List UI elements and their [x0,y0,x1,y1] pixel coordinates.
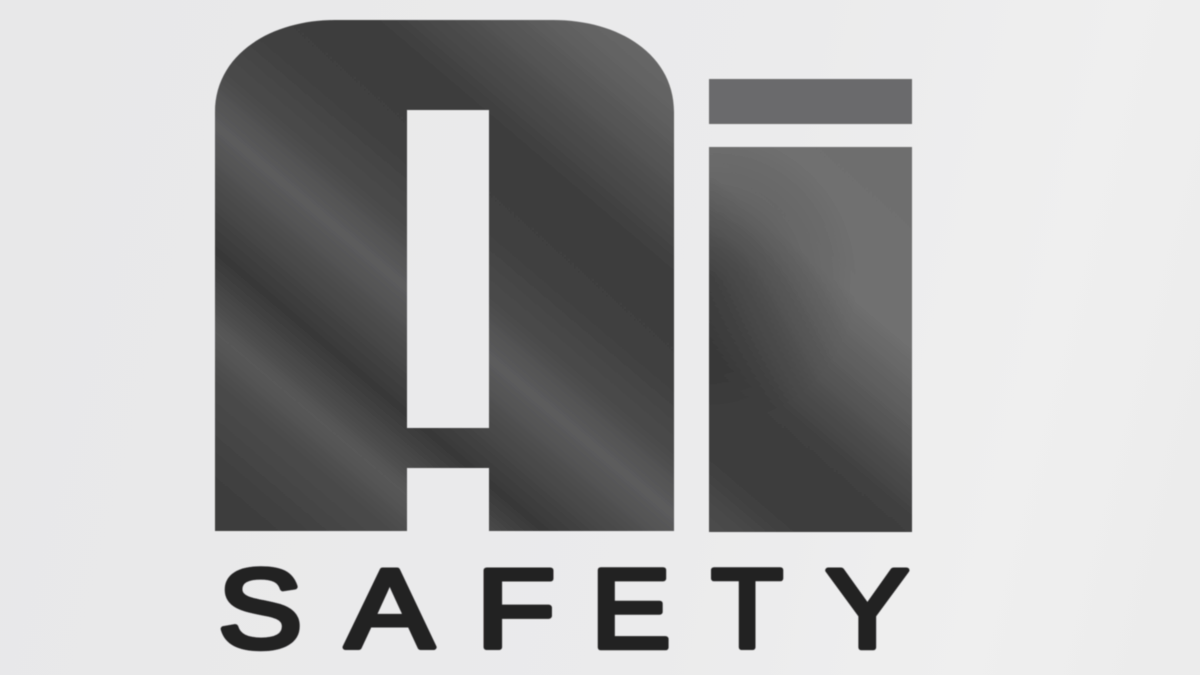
i dot [709,79,912,124]
wordmark: SAFETY: A [346,546,434,671]
logo mark: letter i [709,79,912,532]
wordmark: SAFETY [218,546,909,672]
wordmark: SAFETY: F [476,546,555,671]
wordmark: SAFETY: Y [826,547,909,672]
wordmark: SAFETY: S [218,547,302,672]
wordmark: SAFETY: T [711,547,783,672]
logo mark: letter A [215,20,674,531]
i stem [709,147,912,532]
wordmark: SAFETY: E [591,546,671,671]
